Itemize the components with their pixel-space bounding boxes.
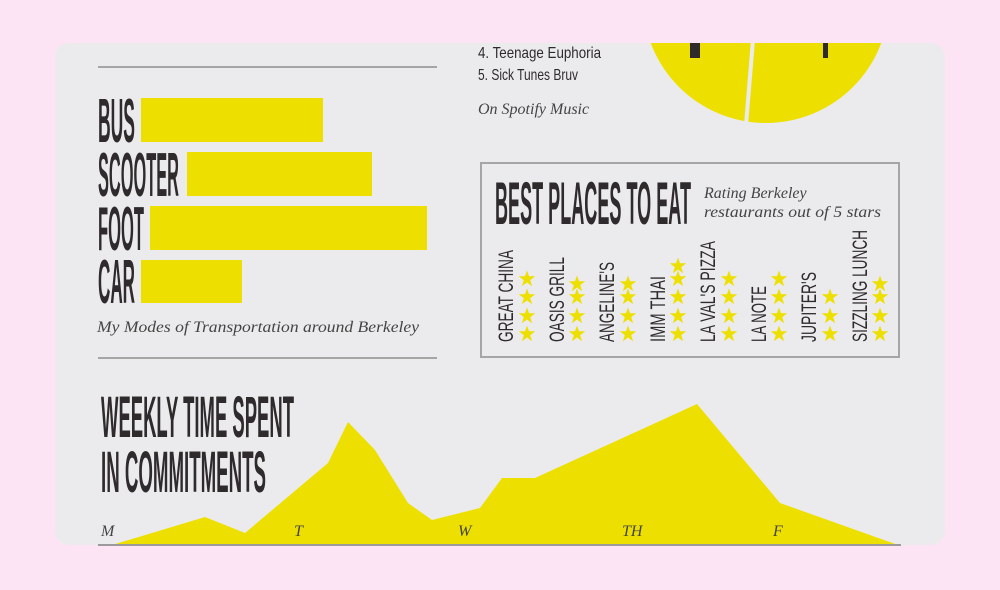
text: WEEKLY TIME SPENT — [101, 385, 294, 450]
restaurant names: SIZZLING LUNCH — [849, 230, 872, 342]
bar chart: transportation: CAR — [98, 248, 135, 317]
bar chart: transportation: SCOOTER — [98, 141, 179, 210]
area chart: weekly time: F — [772, 523, 783, 540]
playlist text: 5. Sick Tunes Bruv — [478, 67, 578, 84]
playlist text: 4. Teenage Euphoria — [478, 45, 601, 62]
text: IN COMMITMENTS — [101, 440, 266, 505]
restaurant names: LA VAL'S PIZZA — [697, 241, 720, 342]
card background — [55, 43, 945, 545]
restaurant names: JUPITER'S — [798, 272, 821, 342]
stars — [519, 257, 888, 341]
panel: best places to eat — [481, 163, 899, 357]
bar chart: transportation: FOOT — [98, 195, 144, 264]
restaurant names: IMM THAI — [647, 276, 670, 342]
area chart: weekly time: TH — [622, 523, 644, 540]
heading: weekly time — [101, 385, 294, 505]
playlist text: On Spotify Music — [478, 101, 589, 118]
restaurant names: LA NOTE — [748, 286, 771, 342]
restaurant names: OASIS GRILL — [546, 257, 569, 342]
restaurant names — [495, 230, 872, 342]
area chart: weekly time: W — [458, 523, 473, 540]
pie chart — [650, 43, 882, 123]
restaurant names: ANGELINE'S — [596, 262, 619, 342]
subtitle: Rating Berkeley — [703, 185, 808, 202]
area chart: weekly time — [98, 404, 901, 545]
area chart: weekly time: T — [294, 523, 304, 540]
bar chart: transportation — [98, 87, 427, 317]
area chart: weekly time: M — [100, 523, 116, 540]
bar chart: transportation: BUS — [98, 87, 135, 156]
panel: best places to eat: restaurants out of 5 stars — [704, 204, 881, 221]
playlist text — [478, 45, 601, 118]
restaurant names: GREAT CHINA — [495, 250, 518, 342]
caption: transportation: My Modes of Transportation around Berkeley — [96, 319, 420, 336]
